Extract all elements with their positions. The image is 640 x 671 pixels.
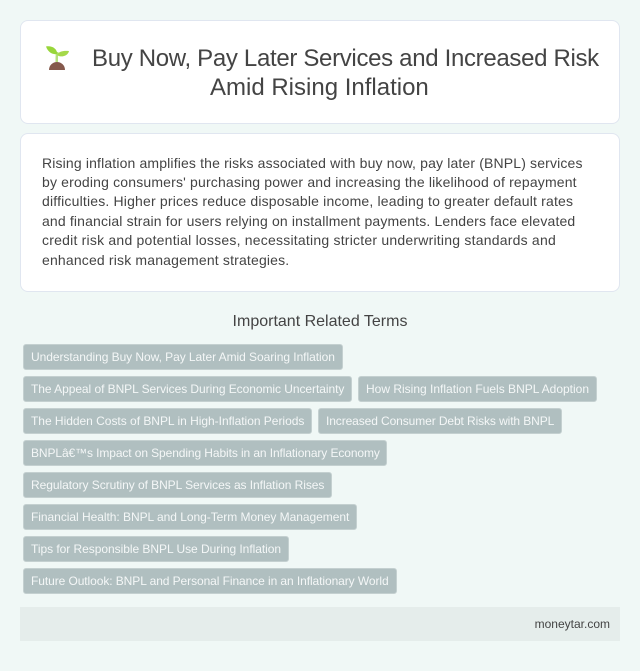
tag: Tips for Responsible BNPL Use During Inflation	[31, 542, 281, 556]
footer	[20, 607, 620, 641]
tag	[23, 472, 332, 498]
panel: summary card	[20, 133, 620, 292]
tag: Understanding Buy Now, Pay Later Amid Soaring Inflation	[31, 350, 335, 364]
tag: Financial Health: BNPL and Long-Term Money Management	[31, 510, 349, 524]
tag: Increased Consumer Debt Risks with BNPL	[326, 414, 554, 428]
text block: summary: Rising inflation amplifies the risks associated with buy now, pay later (BNPL) services	[42, 155, 583, 171]
icon: sprout	[46, 46, 69, 70]
tag: BNPLâ€™s Impact on Spending Habits in an Inflationary Economy	[31, 446, 380, 460]
tag: The Appeal of BNPL Services During Economic Uncertainty	[31, 382, 344, 396]
heading: related terms: Important Related Terms	[233, 313, 407, 330]
title	[92, 45, 600, 101]
title: Buy Now, Pay Later Services and Increased Risk	[92, 45, 599, 72]
tag list	[23, 344, 597, 594]
title: Amid Rising Inflation	[210, 74, 429, 101]
text block: summary: and financial strain for users relying on installment payments. Lenders face elevated	[42, 213, 575, 229]
footer text: moneytar.com: moneytar.com	[535, 617, 610, 631]
tag: Future Outlook: BNPL and Personal Finance in an Inflationary World	[31, 574, 389, 588]
text block: summary: difficulties. Higher prices reduce disposable income, leading to greater default rates	[42, 193, 573, 209]
tag	[23, 440, 387, 466]
text block: summary: credit risk and potential losses, necessitating stricter underwriting standards and	[42, 232, 556, 248]
tag	[23, 568, 397, 594]
tag	[23, 504, 357, 530]
tag	[23, 536, 289, 562]
text block: summary: enhanced risk management strategies.	[42, 252, 289, 268]
tag	[23, 376, 352, 402]
text block: summary	[42, 155, 583, 268]
panel: title card	[20, 20, 620, 124]
tag: Regulatory Scrutiny of BNPL Services as Inflation Rises	[31, 478, 324, 492]
tag	[358, 376, 597, 402]
tag: How Rising Inflation Fuels BNPL Adoption	[366, 382, 589, 396]
tag	[23, 344, 343, 370]
text block: summary: by eroding consumers' purchasing power and increasing the likelihood of repayment	[42, 174, 577, 190]
tag: The Hidden Costs of BNPL in High-Inflation Periods	[31, 414, 304, 428]
tag	[23, 408, 312, 434]
tag	[318, 408, 562, 434]
